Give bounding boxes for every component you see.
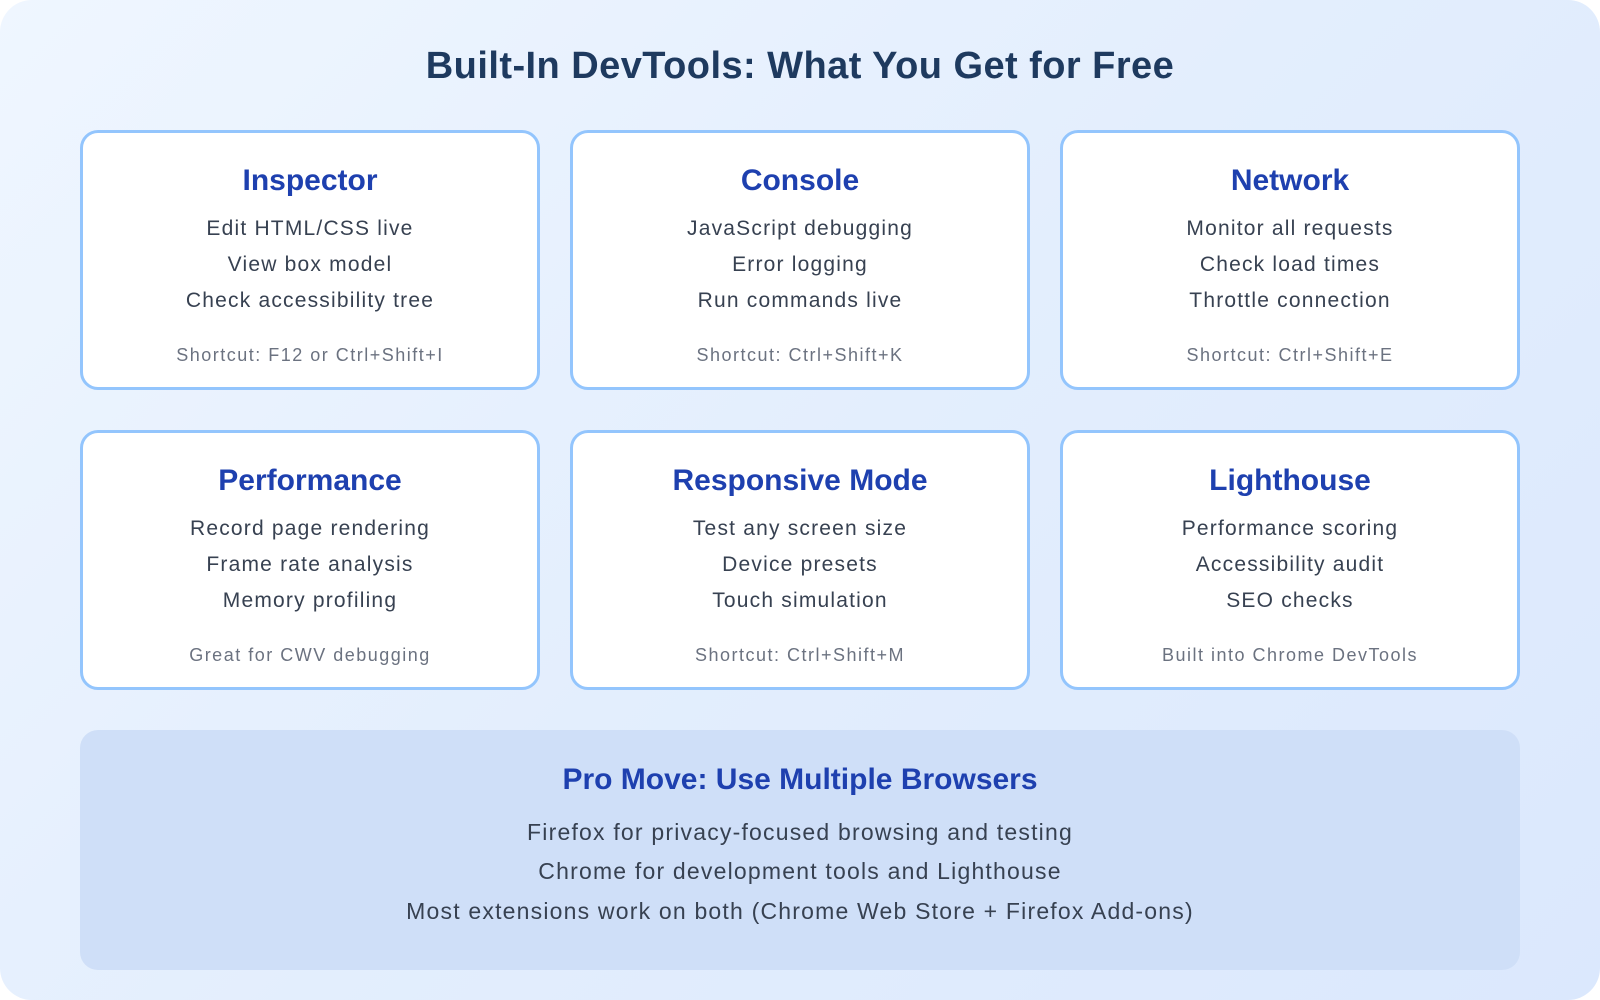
footer: note: Built into Chrome DevTools: [1162, 645, 1418, 665]
heading: Performance: Performance: [218, 464, 402, 497]
text block: inspector features: [186, 217, 434, 312]
footer: shortcut: Shortcut: Ctrl+Shift+K: [696, 345, 904, 365]
panel: Responsive Mode: Test any screen size: [693, 517, 907, 540]
heading: Inspector: Inspector: [242, 164, 378, 197]
panel: Performance: [80, 430, 540, 690]
panel: Network: Check load times: [1200, 253, 1380, 276]
panel: pro move: [80, 730, 1520, 970]
panel: pro move: Chrome for development tools and Lighthouse: [538, 858, 1062, 884]
panel: Lighthouse: Accessibility audit: [1196, 553, 1384, 576]
text block: pro move tips: [406, 819, 1194, 924]
panel: Inspector: Edit HTML/CSS live: [206, 217, 414, 240]
heading: Console: Console: [741, 164, 859, 197]
text block: console features: [687, 217, 913, 312]
panel: pro move: Firefox for privacy-focused browsing and testing: [527, 819, 1073, 845]
panel: Lighthouse: SEO checks: [1226, 589, 1354, 612]
panel: Network: Monitor all requests: [1186, 217, 1394, 240]
panel: Inspector: View box model: [228, 253, 392, 276]
heading: Lighthouse: Lighthouse: [1209, 464, 1371, 497]
panel: Responsive Mode: Device presets: [722, 553, 878, 576]
heading: pro move: Pro Move: Use Multiple Browsers: [562, 763, 1038, 796]
panel: Responsive Mode: [570, 430, 1030, 690]
footer: shortcut: Shortcut: Ctrl+Shift+M: [695, 645, 905, 665]
footer: note: Great for CWV debugging: [189, 645, 431, 665]
panel: Performance: Record page rendering: [190, 517, 430, 540]
panel: Performance: Memory profiling: [223, 589, 397, 612]
panel: Inspector: [80, 130, 540, 390]
panel: Performance: Frame rate analysis: [206, 553, 414, 576]
footer: shortcut: Shortcut: Ctrl+Shift+E: [1186, 345, 1394, 365]
panel: Network: [1060, 130, 1520, 390]
panel: Inspector: Check accessibility tree: [186, 289, 434, 312]
panel: pro move: Most extensions work on both (Chrome Web Store + Firefox Add-ons): [406, 898, 1194, 924]
panel: Network: Throttle connection: [1189, 289, 1391, 312]
panel: Console: Run commands live: [698, 289, 902, 312]
text block: performance features: [190, 517, 430, 612]
text block: lighthouse features: [1182, 517, 1398, 612]
panel: Lighthouse: Performance scoring: [1182, 517, 1398, 540]
panel: Responsive Mode: Touch simulation: [712, 589, 888, 612]
panel: Lighthouse: [1060, 430, 1520, 690]
text block: responsive features: [693, 517, 907, 612]
panel: Console: [570, 130, 1030, 390]
panel: Console: JavaScript debugging: [687, 217, 913, 240]
heading: Network: Network: [1231, 164, 1349, 197]
text block: network features: [1186, 217, 1394, 312]
title: Built-In DevTools: What You Get for Free: [426, 45, 1174, 87]
heading: Responsive Mode: Responsive Mode: [672, 464, 928, 497]
panel: Console: Error logging: [732, 253, 868, 276]
footer: shortcut: Shortcut: F12 or Ctrl+Shift+I: [176, 345, 444, 365]
